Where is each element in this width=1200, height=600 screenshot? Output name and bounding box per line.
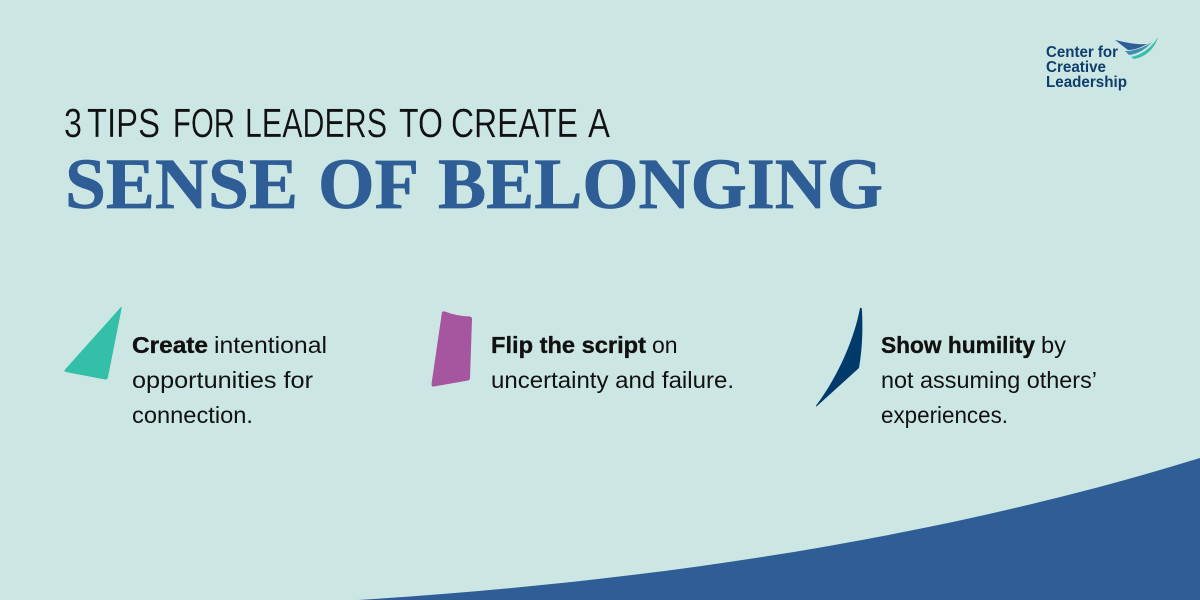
tip 3 text: experiences. xyxy=(881,402,1008,428)
tip 2 text: Flip the script xyxy=(491,332,646,358)
logo: Center for Creative Leadership xyxy=(1046,37,1158,91)
tip 2 text: on xyxy=(652,332,678,358)
decorative blue curve xyxy=(358,458,1200,600)
logo wordmark: Leadership xyxy=(1046,74,1127,91)
icon: purple quadrilateral xyxy=(432,311,472,387)
title line 1: TO xyxy=(399,100,443,146)
tip 2 text xyxy=(491,332,734,393)
tip 2 text: uncertainty and failure. xyxy=(491,367,734,393)
icon: teal triangle shard xyxy=(64,307,122,380)
logo mark: sail swoosh xyxy=(1115,37,1158,59)
tip 3 text: by xyxy=(1041,332,1067,358)
title line 1: FOR xyxy=(173,100,235,146)
tip 3 text xyxy=(881,332,1097,428)
title line 1: 3 xyxy=(64,100,82,146)
tip 3 text: Show humility xyxy=(881,332,1035,358)
title line 2: SENSE xyxy=(65,144,298,224)
logo wordmark xyxy=(1046,44,1127,91)
tip 1 text: intentional xyxy=(214,332,327,358)
tip 3: show humility xyxy=(816,308,1097,428)
title line 2: BELONGING xyxy=(438,144,883,224)
logo wordmark: Creative xyxy=(1046,59,1106,76)
tip 1 text: Create xyxy=(132,332,208,358)
tip 2: flip the script xyxy=(432,311,734,393)
title line 1: TIPS xyxy=(87,100,160,146)
title xyxy=(64,100,883,224)
title line 1 xyxy=(64,100,611,146)
tip 1 text xyxy=(132,332,327,428)
title line 1: LEADERS xyxy=(245,100,387,146)
tip 1: create xyxy=(64,307,327,428)
title line 2: OF xyxy=(318,144,419,224)
icon: navy curved shard xyxy=(816,308,862,406)
tip 1 text: opportunities for xyxy=(132,367,313,393)
title line 2 xyxy=(65,144,883,224)
tip 1 text: connection. xyxy=(132,402,253,428)
tip 3 text: not assuming others’ xyxy=(881,367,1097,393)
title line 1: CREATE xyxy=(451,100,578,146)
logo wordmark: Center for xyxy=(1046,44,1118,61)
title line 1: A xyxy=(588,100,611,146)
